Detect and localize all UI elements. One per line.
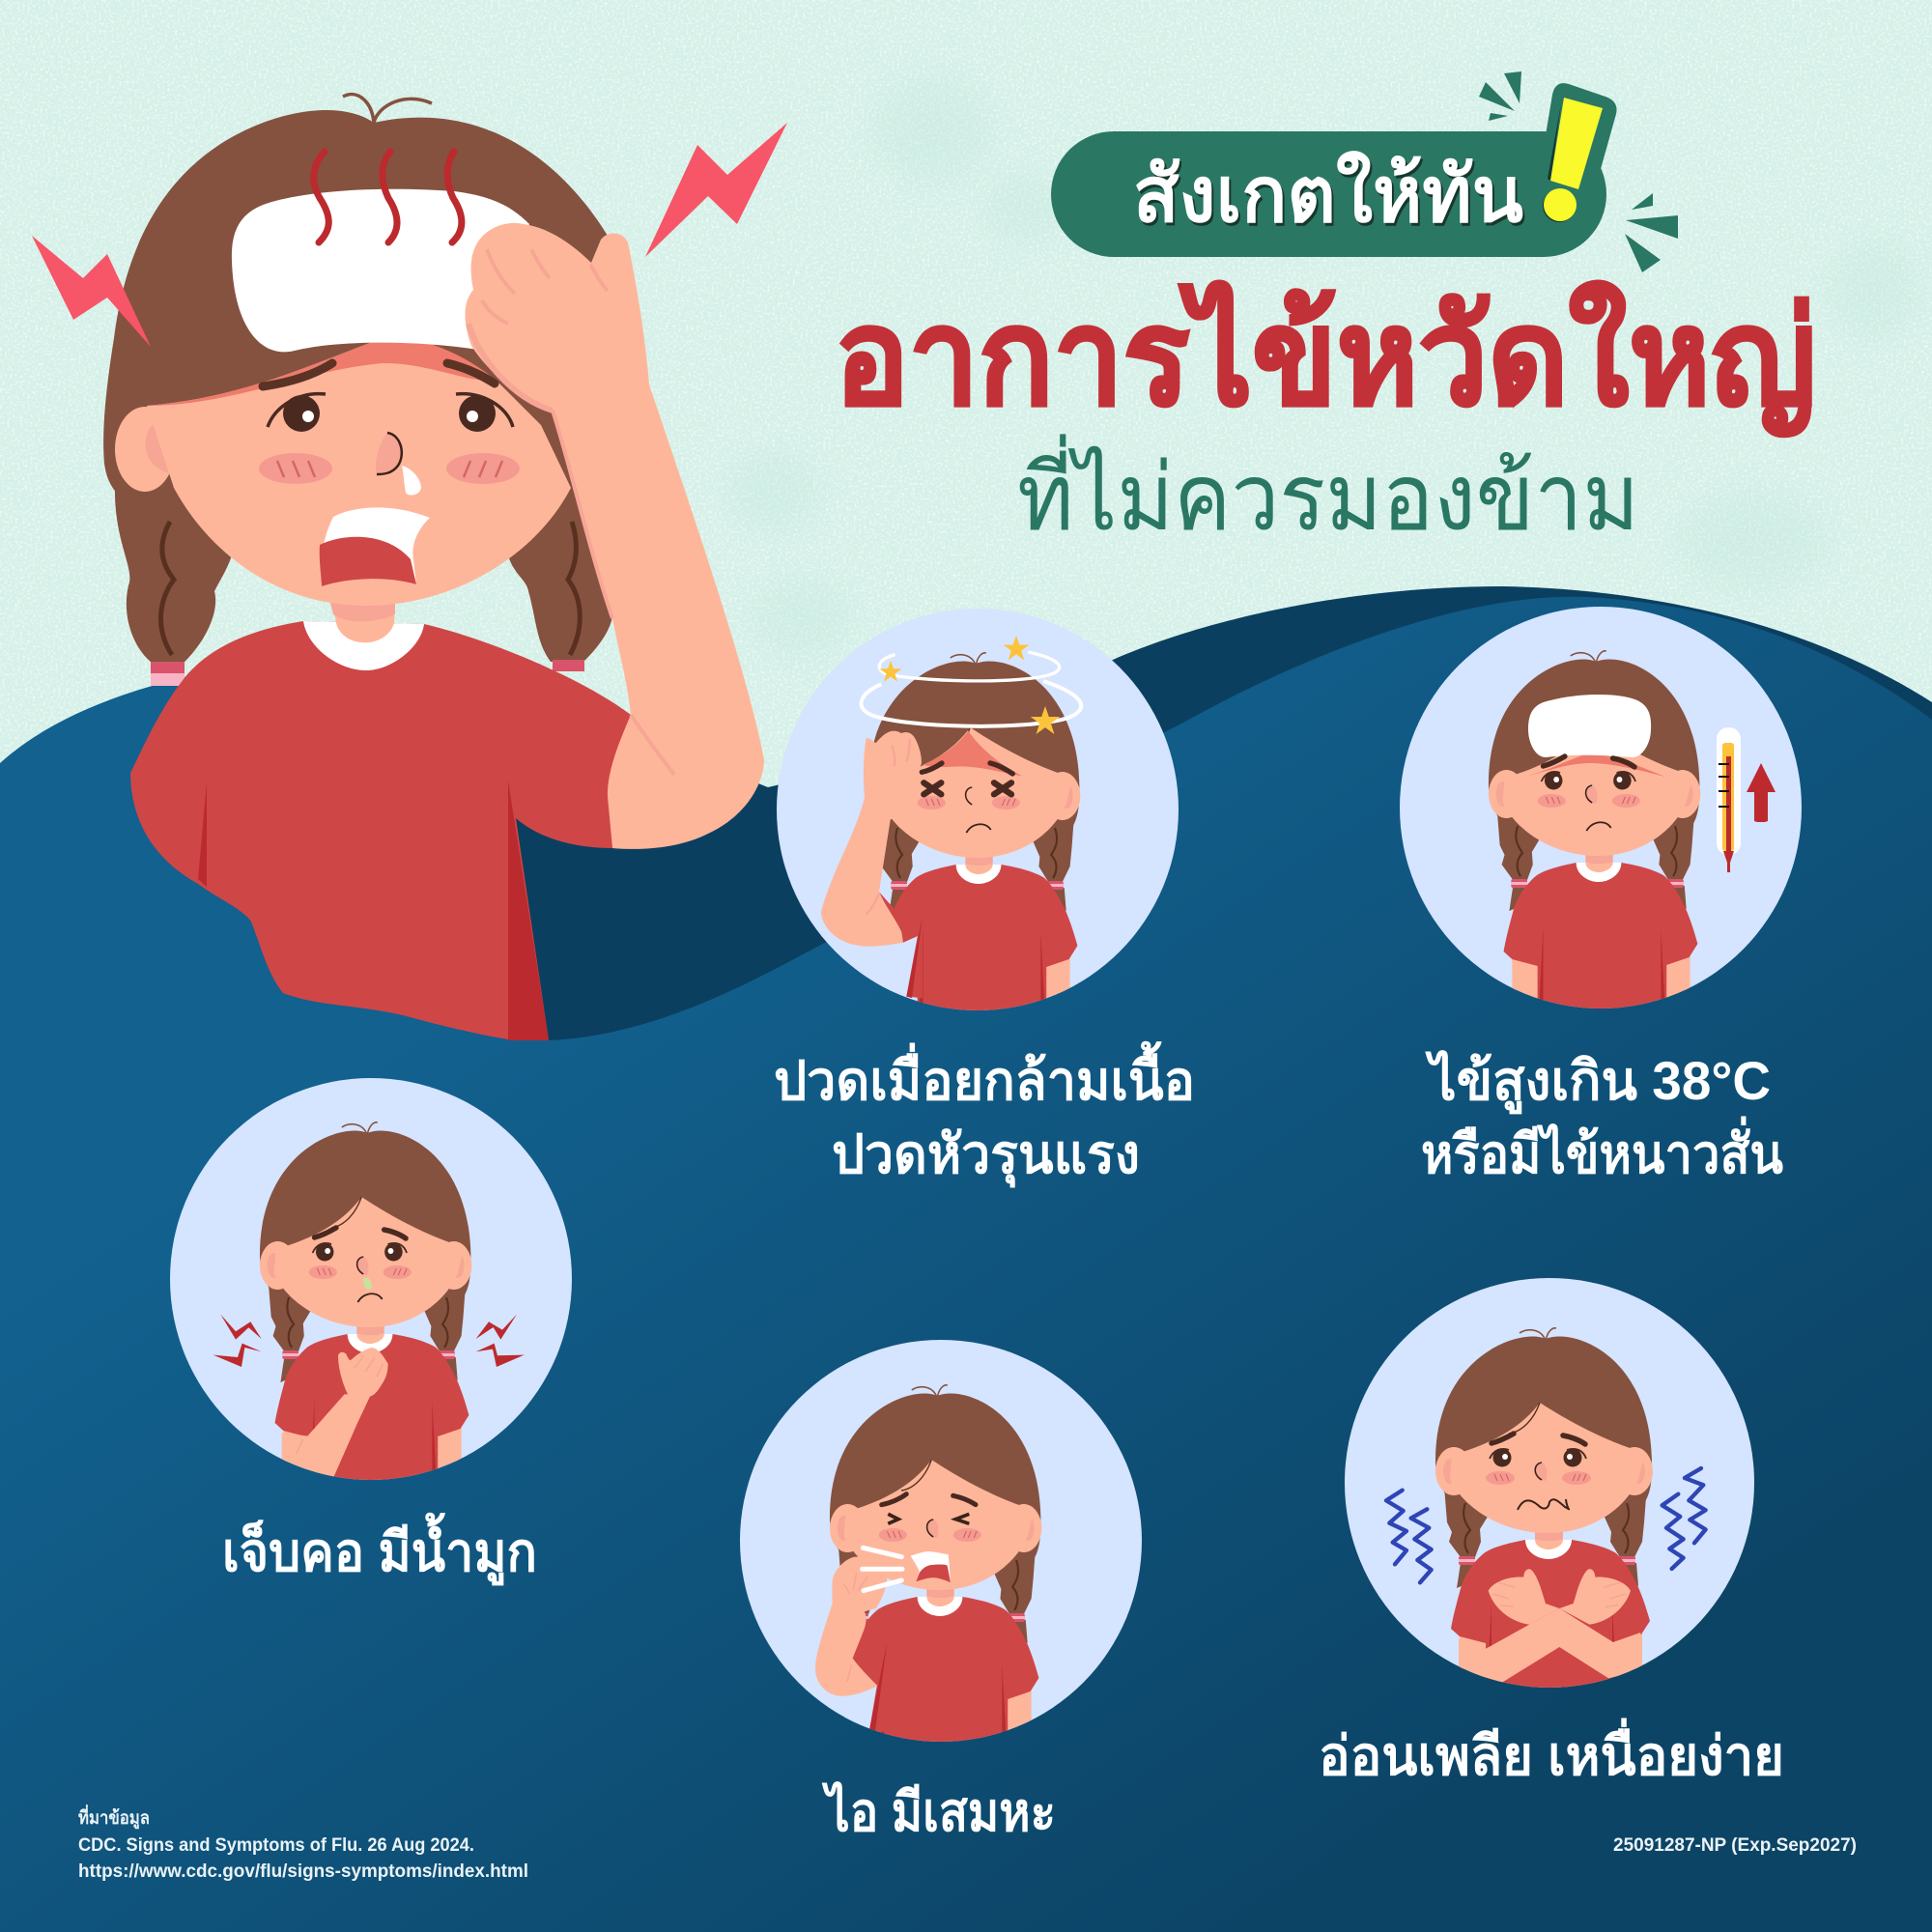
girl dizzy (821, 636, 1081, 1038)
label: muscle ache: ปวดเมื่อยกล้ามเนื้อ (774, 1041, 1195, 1111)
cooling patch (232, 189, 529, 352)
neck shade (329, 599, 395, 622)
circle (170, 1078, 572, 1480)
girl with sore throat (260, 1122, 471, 1508)
title badge (1051, 71, 1678, 272)
label: fever: ไข้สูงเกิน 38°C (1425, 1049, 1771, 1115)
ear (115, 407, 175, 492)
label: sore throat: เจ็บคอ มีน้ำมูก (222, 1513, 537, 1586)
label: cough: ไอ มีเสมหะ (822, 1780, 1056, 1842)
label: chills: หรือมีไข้หนาวสั่น (1421, 1116, 1783, 1184)
eyes (268, 394, 513, 432)
cheeks (259, 453, 520, 484)
pain bolts (213, 1315, 525, 1367)
panel: high fever (1400, 607, 1802, 1037)
right braid (508, 488, 612, 671)
circle (740, 1340, 1142, 1742)
up arrow (1747, 763, 1776, 822)
exclamation mark (1543, 83, 1617, 222)
hair (103, 110, 618, 502)
hair strands (343, 95, 432, 123)
source note: CDC. Signs and Symptoms of Flu. 26 Aug 2024. (78, 1835, 474, 1856)
panel: cough (740, 1340, 1142, 1771)
circle (777, 609, 1179, 1010)
badge text: สังเกตให้ทัน (1133, 150, 1523, 238)
arm and hand (465, 223, 764, 849)
forehead shade (147, 337, 497, 406)
main title: อาการไข้หวัดใหญ่ (835, 281, 1816, 438)
label: severe headache: ปวดหัวรุนแรง (832, 1123, 1140, 1188)
main girl illustration (103, 95, 764, 1040)
panel: sore throat (170, 1078, 572, 1508)
circle (1345, 1278, 1754, 1688)
girl with patch (1489, 651, 1700, 1037)
back wave (464, 586, 1932, 1063)
panel: fatigue (1345, 1278, 1754, 1714)
source note (78, 1804, 528, 1882)
girl coughing (815, 1385, 1041, 1771)
subtitle: ที่ไม่ควรมองข้าม (1017, 434, 1639, 550)
heat squiggles (314, 152, 462, 242)
nose (376, 433, 403, 474)
neck (330, 589, 395, 642)
collar (303, 621, 424, 670)
girl shivering (1435, 1328, 1653, 1714)
left braid (115, 483, 232, 686)
source note: ที่มาข้อมูล (78, 1804, 150, 1830)
front wave (0, 597, 1932, 1932)
thermometer (1717, 727, 1741, 872)
lightning left (32, 236, 151, 347)
shirt (130, 621, 631, 1040)
lightning right (645, 123, 787, 257)
pill (1051, 131, 1606, 257)
nasal drip (402, 466, 421, 496)
panel: muscle ache and headache (777, 609, 1179, 1038)
face (147, 338, 571, 606)
source note: https://www.cdc.gov/flu/signs-symptoms/index.html (78, 1861, 528, 1882)
circle (1400, 607, 1802, 1009)
shiver marks (1386, 1468, 1706, 1582)
mouth (320, 507, 430, 586)
eyebrows (263, 363, 495, 386)
label: fatigue: อ่อนเพลีย เหนื่อยง่าย (1319, 1718, 1784, 1786)
document code: 25091287-NP (Exp.Sep2027) (1613, 1835, 1857, 1856)
burst lines (1479, 71, 1678, 272)
